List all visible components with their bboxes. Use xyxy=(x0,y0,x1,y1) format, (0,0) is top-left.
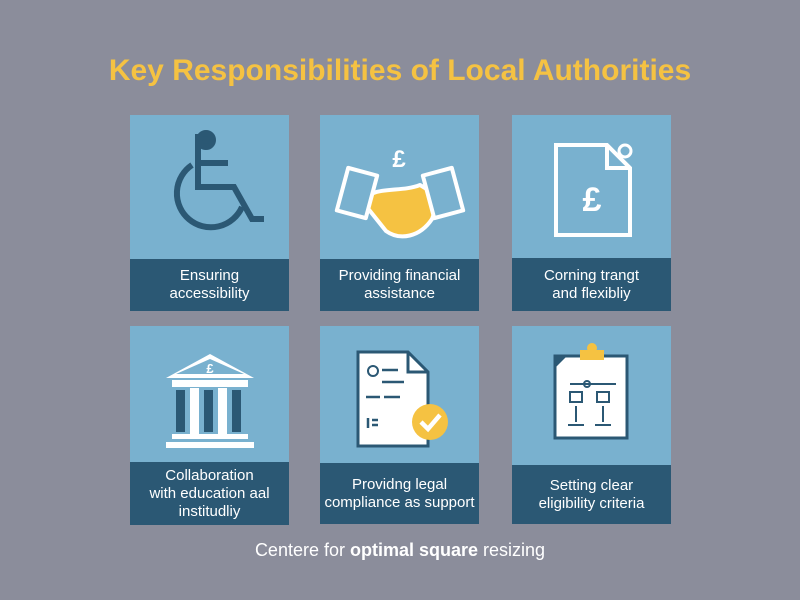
label: accessibility xyxy=(169,285,250,302)
label: Collaboration xyxy=(165,466,254,484)
icon: clipboard xyxy=(554,343,628,440)
panel: transport xyxy=(512,115,671,311)
icon: document check xyxy=(356,350,448,448)
label xyxy=(130,462,289,525)
label xyxy=(130,259,289,311)
icon: document pound: £ xyxy=(583,181,602,219)
label: Providng legal xyxy=(352,476,447,492)
label: and flexibliy xyxy=(552,284,631,302)
label xyxy=(512,465,671,524)
label: Providing financial xyxy=(339,267,460,284)
label: institudliy xyxy=(179,502,240,520)
title: Key Responsibilities of Local Authorities xyxy=(109,54,691,87)
icon: wheelchair xyxy=(174,130,264,230)
panel: collaboration xyxy=(130,326,289,525)
label xyxy=(512,258,671,311)
label xyxy=(320,259,479,311)
icon: handshake with pound: £ xyxy=(392,146,406,173)
panel: financial assistance xyxy=(320,115,479,311)
icon: document pound xyxy=(554,143,632,237)
icon: handshake with pound xyxy=(334,146,466,238)
icon: building xyxy=(166,354,254,448)
footer caption: Centere for optimal square resizing xyxy=(255,540,545,560)
label: Setting clear xyxy=(550,476,633,494)
icon: building: £ xyxy=(206,361,214,376)
label: with education aal xyxy=(149,484,270,502)
label: assistance xyxy=(364,285,435,302)
label xyxy=(320,463,479,524)
label: eligibility criteria xyxy=(539,494,644,512)
panel: legal compliance xyxy=(320,326,479,524)
panel: accessibility xyxy=(130,115,289,311)
panel: eligibility xyxy=(512,326,671,524)
label: Ensuring xyxy=(180,267,239,284)
label: Corning trangt xyxy=(544,266,639,284)
label: compliance as support xyxy=(324,494,475,510)
